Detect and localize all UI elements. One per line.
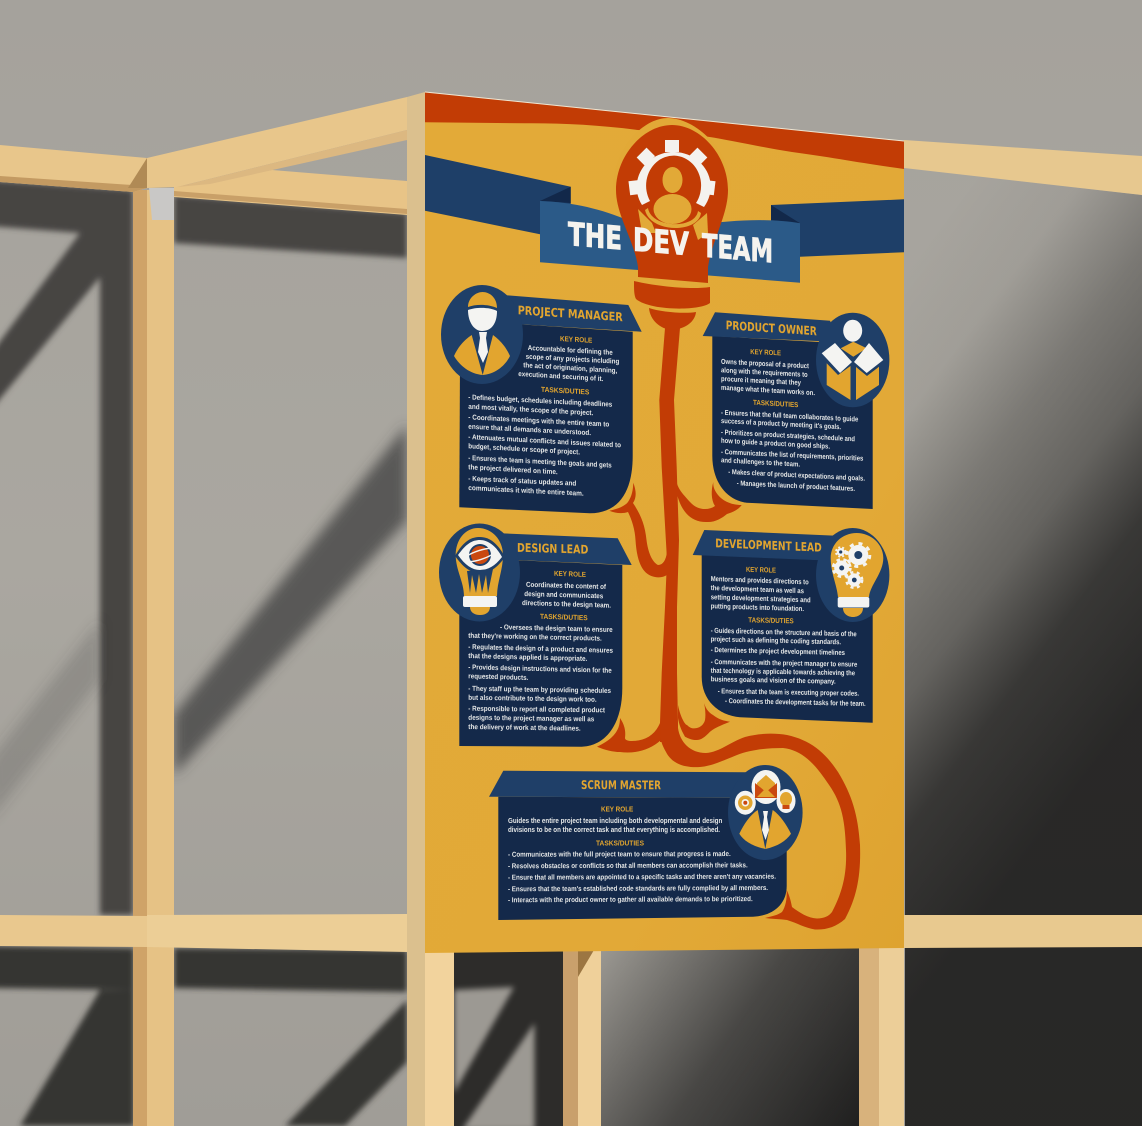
root stem with branches — [597, 328, 860, 930]
title: THE — [568, 215, 622, 258]
panel text: Accountable for defining the — [528, 344, 613, 357]
trunk — [659, 328, 680, 742]
top red band — [425, 92, 904, 169]
panel body — [459, 560, 622, 747]
under-poster wall: left bay — [454, 950, 564, 1126]
panel text: - Attenuates mutual conflicts and issues related to — [468, 433, 622, 449]
panel text: the act of origination, planning, — [523, 361, 617, 375]
icon: person in box — [816, 313, 889, 407]
panel text: scope of any projects including — [526, 353, 619, 366]
heading ribbon — [503, 295, 642, 332]
panel text: and challenges to the team. — [721, 456, 800, 469]
bulb cup — [649, 308, 696, 330]
panel text: the development team as well as — [711, 584, 804, 595]
panel text: - Coordinates meetings with the entire team to — [468, 413, 610, 429]
ribbon front — [540, 201, 800, 283]
upper right branch — [676, 480, 742, 522]
panel text: Owns the proposal of a product — [721, 358, 810, 370]
panel text: KEY ROLE — [601, 805, 633, 814]
panel text: - Ensure that all members are appointed to a specific tasks and there aren't any vacancies. — [508, 873, 776, 882]
heading: DESIGN LEAD — [517, 541, 588, 557]
heading ribbon — [693, 530, 840, 561]
panel text: - Guides directions on the structure and basis of the — [711, 627, 857, 638]
lower left branch — [597, 718, 661, 752]
title: TEAM — [702, 227, 773, 270]
panel text: - They staff up the team by providing schedules — [468, 685, 611, 695]
panel text: - Determines the project development timelines — [711, 646, 845, 657]
panel text: putting products into foundation. — [711, 602, 804, 613]
bulb collar — [634, 281, 710, 309]
heading: PRODUCT OWNER — [726, 318, 817, 338]
panel text — [468, 569, 613, 733]
panel text: - Ensures that the full team collaborates to guide — [721, 409, 858, 424]
title ribbon — [425, 155, 904, 283]
panel text: execution and securing of it. — [518, 370, 603, 383]
title: DEV — [633, 221, 689, 263]
panel text: requested products. — [468, 672, 528, 682]
panel text: - Communicates with the full project team to ensure that progress is made. — [508, 850, 731, 859]
panel text: - Ensures that the team is executing proper codes. — [718, 687, 859, 698]
panel body — [498, 797, 787, 920]
icon: engineer — [441, 285, 523, 384]
panel text — [721, 347, 865, 493]
upper left branch — [609, 483, 671, 577]
icon: bulb with planet eye — [439, 524, 520, 622]
panel text: Mentors and provides directions to — [711, 575, 809, 586]
panel: design lead — [439, 524, 632, 747]
light bulb with gear and person — [613, 118, 731, 330]
panel: scrum master — [489, 765, 803, 920]
heading: DEVELOPMENT LEAD — [715, 536, 822, 555]
wall shadows — [0, 180, 407, 1126]
panel text: KEY ROLE — [750, 347, 781, 357]
panel text: TASKS/DUTIES — [596, 838, 644, 848]
panel text: - Resolves obstacles or conflicts so that all members can accomplish their tasks. — [508, 861, 748, 870]
panel text: ensure that all demands are understood. — [468, 423, 591, 437]
panel text: directions to the design team. — [522, 599, 611, 610]
panel text — [508, 805, 776, 904]
poster board — [425, 92, 904, 953]
panel text: how to guide a product on good ships. — [721, 437, 830, 451]
panel text: - Responsible to report all completed product — [468, 705, 606, 714]
panel text: the delivery of work at the deadlines. — [468, 723, 581, 733]
title — [568, 215, 773, 270]
panel text: designs to the project manager as well as — [468, 714, 594, 723]
icon: manager with three ideas — [728, 765, 803, 860]
left ribbon tail — [425, 155, 571, 240]
panel text: setting development strategies and — [711, 593, 811, 604]
panel text: TASKS/DUTIES — [753, 398, 798, 409]
panel text: - Ensures that the team's established code standards are fully complied by all members. — [508, 884, 768, 893]
bulb outline — [613, 118, 731, 190]
panel body — [712, 336, 873, 509]
panel text: along with the requirements to — [721, 366, 808, 379]
bulb glass — [616, 125, 728, 283]
panel: product owner — [703, 312, 889, 509]
panel text: - Manages the launch of product features. — [737, 479, 855, 493]
panel text: KEY ROLE — [560, 334, 592, 345]
panel text: manage what the team works on. — [721, 384, 815, 397]
long tail to scrum master — [660, 728, 860, 930]
panel text: - Interacts with the product owner to gather all available demands to be prioritized. — [508, 895, 753, 904]
panel text: project such as defining the coding standards. — [711, 635, 841, 646]
panel text: Coordinates the content of — [526, 581, 607, 591]
panel text: and most vitally, the scope of the project. — [468, 403, 593, 417]
panel text: the project delivered on time. — [468, 463, 558, 476]
panel text: TASKS/DUTIES — [540, 612, 588, 622]
panel text: - Makes clear of product expectations and goals. — [728, 468, 865, 483]
dark right side — [905, 168, 1142, 1126]
panel text: budget, schedule or scope of project. — [468, 442, 580, 456]
icon: bulb with gears — [816, 528, 889, 622]
panel text: TASKS/DUTIES — [541, 385, 589, 397]
panel text: that technology is applicable towards achieving the — [711, 667, 855, 677]
panel: development lead — [693, 528, 889, 723]
icon: gear — [628, 140, 716, 207]
panel text: - Regulates the design of a product and ensures — [468, 643, 613, 655]
panel text: - Ensures the team is meeting the goals and gets — [468, 454, 612, 470]
panel text: success of a product by meeting it's goals. — [721, 417, 841, 431]
lower right branch — [678, 700, 730, 740]
right ribbon tail — [771, 199, 904, 257]
under-poster wall: right bay — [600, 945, 860, 1126]
panel text: business goals and vision of the company. — [711, 675, 836, 686]
panel text — [468, 334, 622, 498]
icon: person — [654, 167, 692, 224]
panel text: - Coordinates the development tasks for the team. — [725, 697, 866, 708]
panel text: - Provides design instructions and vision for the — [468, 663, 612, 675]
panel body — [459, 324, 633, 513]
heading: SCRUM MASTER — [581, 778, 661, 792]
panel text: communicates it with the entire team. — [468, 484, 584, 498]
panel text — [711, 565, 866, 708]
panel text: Guides the entire project team including both developmental and design — [508, 817, 722, 825]
panel: project manager — [441, 285, 642, 513]
panel text: divisions to be on the correct task and that everything is accomplished. — [508, 826, 720, 834]
panel text: that the designs applied is appropriate. — [468, 652, 587, 663]
heading: PROJECT MANAGER — [518, 303, 623, 324]
panel text: KEY ROLE — [746, 565, 776, 575]
heading ribbon — [703, 312, 840, 342]
panel text: - Communicates the list of requirements, priorities — [721, 448, 863, 463]
panel body — [702, 555, 873, 723]
panel text: KEY ROLE — [554, 569, 586, 579]
heading ribbon — [489, 771, 747, 798]
panel text: that they're working on the correct products. — [468, 632, 602, 643]
panel text: procure it meaning that they — [721, 375, 801, 387]
panel text: - Communicates with the project manager to ensure — [711, 658, 857, 669]
panel text: - Prioritizes on product strategies, schedule and — [721, 428, 855, 443]
panel text: TASKS/DUTIES — [748, 615, 794, 625]
panel text: design and communicates — [524, 590, 603, 600]
panel text: - Defines budget, schedules including deadlines — [468, 393, 612, 409]
panel text: but also contribute to the design work too. — [468, 694, 597, 704]
panel text: - Oversees the design team to ensure — [500, 623, 613, 634]
heading ribbon — [500, 533, 632, 565]
panel text: - Keeps track of status updates and — [468, 475, 576, 488]
icon: ribbon tails — [638, 208, 708, 240]
ribbon folds — [540, 187, 571, 203]
